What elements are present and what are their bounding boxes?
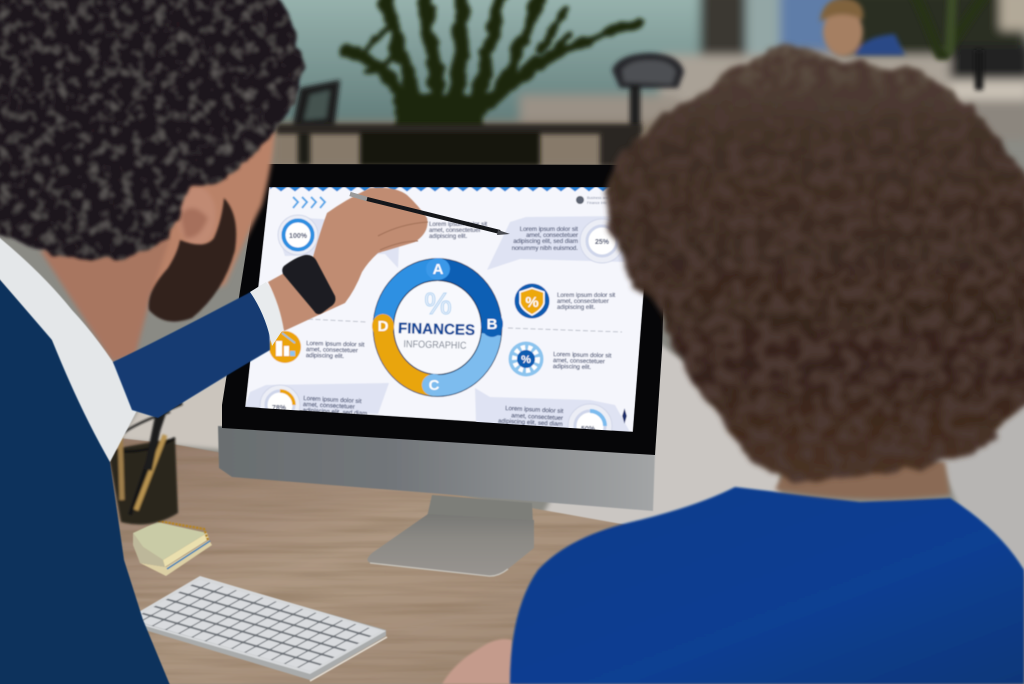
text: top middle: amet, consectetuer: [429, 227, 481, 234]
man: shirt cuff: [250, 282, 284, 346]
text: bottom right: amet, consectetuer: [511, 412, 563, 422]
donut chart: [372, 258, 503, 396]
text: top middle: adipiscing elit.: [429, 233, 468, 240]
badge A: A: [433, 261, 444, 278]
text: bottom right: adipiscing elit, sed diam: [498, 418, 563, 428]
pencil: [350, 194, 510, 235]
monitor stand: [367, 495, 534, 576]
icon: shield: [514, 284, 550, 318]
text: gear: Lorem ipsum dolor sit: [553, 351, 612, 360]
text: bar chart: Lorem ipsum dolor sit: [306, 340, 365, 349]
text: gear: [553, 351, 612, 372]
text: bottom left: adipiscing elit, sed diam: [302, 407, 367, 417]
text: top right: Lorem ipsum dolor sit: [520, 226, 578, 233]
gauge: 78%: 78%: [272, 405, 287, 412]
text: bottom right: [498, 405, 564, 428]
woman: neck: [775, 460, 950, 499]
gauge: 78%: [259, 384, 300, 411]
background chairs and table: [276, 50, 983, 166]
text: bar chart: amet, consectetuer: [306, 346, 358, 354]
man: hair: [0, 0, 302, 259]
gauge: 25%: 25%: [595, 239, 610, 246]
man: face: [40, 130, 275, 362]
screen infographic: [245, 187, 652, 448]
text: top right: nonummy nibh euismod.: [512, 245, 578, 252]
text: shield: Lorem ipsum dolor sit: [557, 292, 616, 299]
callout: bottom left: [246, 383, 389, 415]
badge C: C: [429, 377, 440, 394]
text: gear: amet, consectetuer: [553, 357, 605, 365]
text: top right: [512, 226, 578, 252]
badge D: D: [378, 318, 389, 335]
text: shield: [557, 292, 616, 311]
monitor bezel: [222, 164, 668, 455]
icon: gear: %: [521, 354, 531, 366]
chevrons: [293, 197, 325, 208]
keyboard: [125, 576, 387, 681]
woman: curly hair: [606, 46, 1024, 480]
top zigzag border: [270, 187, 608, 192]
man: forearm and hand: [268, 188, 428, 331]
wall behind monitor: [120, 330, 1024, 580]
monitor: [218, 164, 668, 576]
text: bottom left: [302, 395, 368, 415]
man: beard: [149, 198, 236, 322]
percent icon: %: [424, 286, 452, 321]
text: shield: adipiscing elit.: [557, 304, 596, 311]
text: top right: adipiscing elit, sed diam: [513, 238, 578, 245]
woman's hand: [442, 639, 515, 684]
icon: gear: [508, 342, 544, 376]
title: FINANCES: [398, 320, 475, 339]
wooden desk: [60, 436, 700, 684]
icon: shield: %: [525, 294, 539, 311]
text: bar chart: [306, 340, 365, 361]
gauge: 50%: [568, 405, 612, 431]
gauge: 100%: 100%: [289, 233, 308, 240]
man: collar: [0, 230, 140, 462]
text: gear: adipiscing elit.: [553, 363, 591, 371]
text: top right: amet, consectetuer: [526, 232, 578, 239]
text: shield: amet, consectetuer: [557, 298, 609, 305]
divider right: [508, 328, 622, 332]
notebook: [133, 521, 212, 576]
logo top right: Business and: [587, 196, 609, 200]
gauge: 50%: 50%: [581, 426, 596, 433]
decorative star: [623, 411, 626, 421]
monitor chin: [218, 426, 655, 511]
text: bottom right: Lorem ipsum dolor sit: [505, 405, 564, 415]
icon: bar chart: [269, 331, 301, 363]
callout: top left: [278, 215, 400, 268]
man: sleeve: [113, 286, 270, 418]
man: watch: [282, 255, 335, 314]
plant behind colleague: [915, 0, 985, 55]
text: bottom left: Lorem ipsum dolor sit: [303, 395, 362, 405]
text: top middle: Lorem ipsum dolor sit: [429, 221, 488, 228]
text: bar chart: adipiscing elit.: [306, 352, 344, 360]
woman: blouse: [510, 487, 1024, 684]
pen holder: [108, 403, 182, 525]
subtitle: INFOGRAPHIC: [403, 339, 467, 352]
badge B: B: [487, 316, 498, 333]
text: bottom left: amet, consectetuer: [303, 401, 355, 411]
divider left: [308, 319, 366, 322]
logo top right: [576, 196, 609, 205]
background plant: [345, 0, 640, 132]
callout: top right: [487, 216, 625, 270]
logo top right: Finance info: [587, 201, 607, 205]
man: jacket: [0, 268, 172, 684]
screen background: [245, 187, 652, 432]
background person: [820, 0, 905, 56]
callout: bottom right: [475, 388, 630, 432]
text: top middle: [429, 221, 488, 240]
